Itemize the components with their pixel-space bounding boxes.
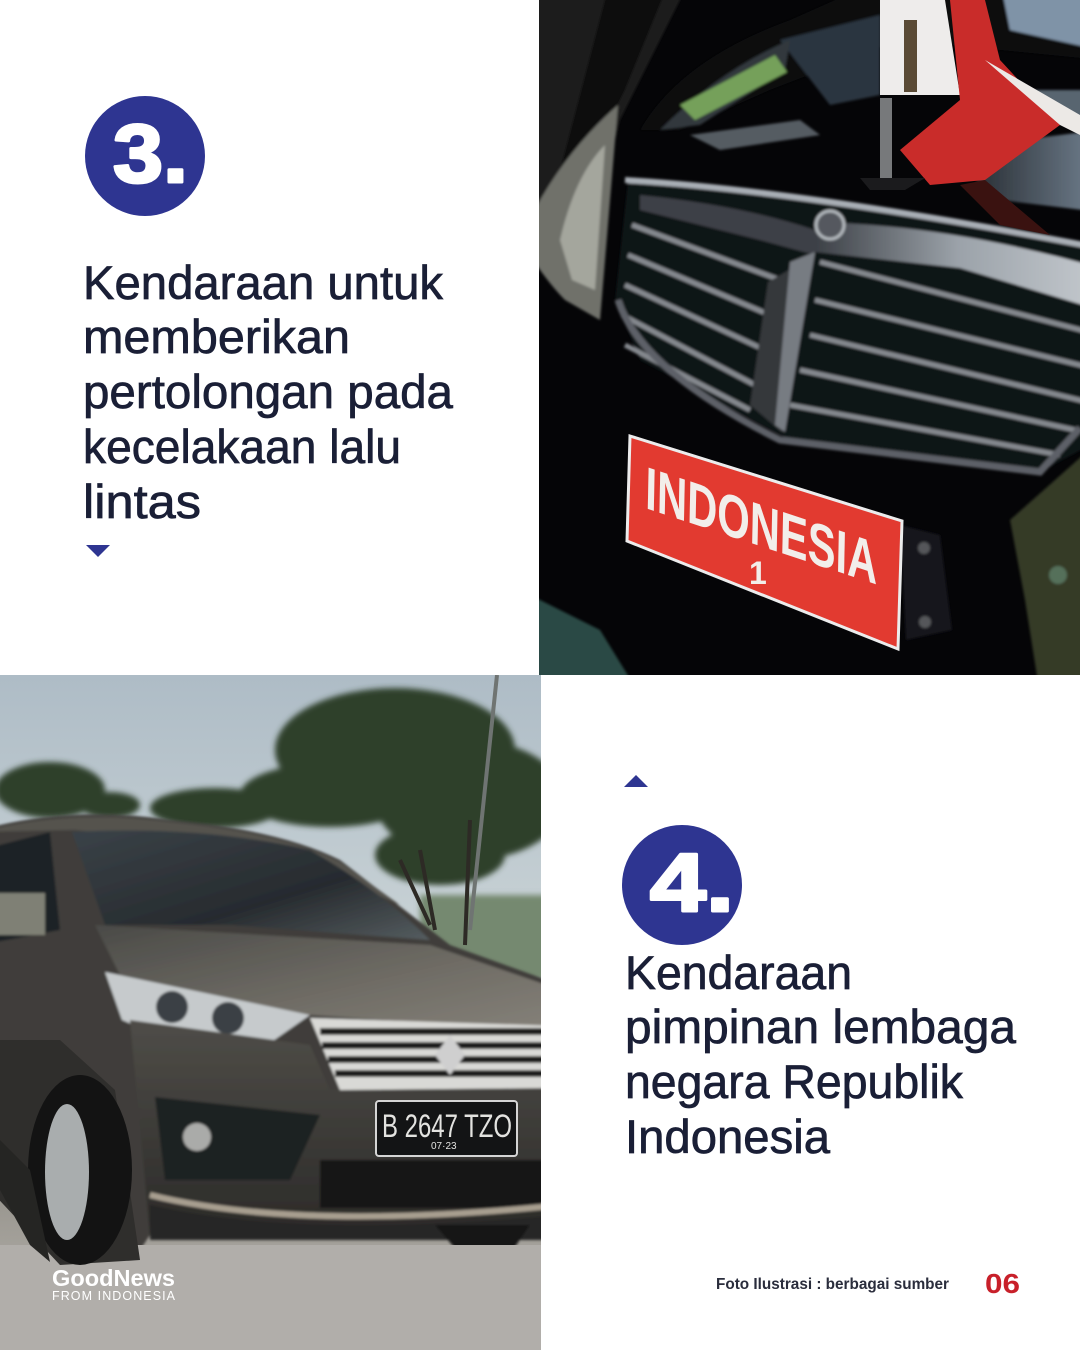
heading: item 3: pertolongan pada [83, 365, 454, 418]
badge: number 4: 4. [650, 836, 734, 929]
icon: down triangle [86, 545, 110, 557]
flag on car bonnet [860, 0, 1080, 235]
heading: item 3 [83, 256, 454, 528]
front wheel [0, 1040, 140, 1265]
heading: item 4: Kendaraan [625, 946, 852, 999]
licence plate: Indonesia 1: INDONESIA [645, 454, 878, 598]
heading: item 3: lintas [83, 475, 201, 528]
badge: number 3 [85, 96, 205, 216]
licence plate: 07·23 [431, 1141, 457, 1152]
logo: GoodNews from Indonesia: GoodNews [52, 1265, 175, 1291]
licence plate: B 2647 TZO [382, 1108, 512, 1144]
heading: item 4: Indonesia [625, 1110, 831, 1163]
licence plate [376, 1101, 517, 1156]
photo credit: Foto Ilustrasi : berbagai sumber [716, 1276, 949, 1293]
heading: item 3: Kendaraan untuk [83, 256, 443, 309]
heading: item 4: negara Republik [625, 1055, 963, 1108]
heading: item 4: pimpinan lembaga [625, 1000, 1017, 1053]
logo: GoodNews from Indonesia [52, 1265, 176, 1303]
heading: item 4 [625, 946, 1017, 1163]
photo: grey Suzuki Ertiga [0, 675, 565, 1350]
heading: item 3: kecelakaan lalu [83, 420, 401, 473]
heading: item 3: memberikan [83, 310, 350, 363]
page number: 06 [985, 1268, 1020, 1299]
badge: number 4 [622, 825, 742, 945]
icon: up triangle [624, 775, 648, 787]
licence plate: Indonesia 1 [627, 436, 902, 649]
photo: presidential car with Indonesia 1 plate [520, 0, 1080, 695]
licence plate: Indonesia 1: 1 [749, 555, 767, 591]
logo: GoodNews from Indonesia: FROM INDONESIA [52, 1289, 176, 1303]
badge: number 3: 3. [113, 107, 188, 200]
